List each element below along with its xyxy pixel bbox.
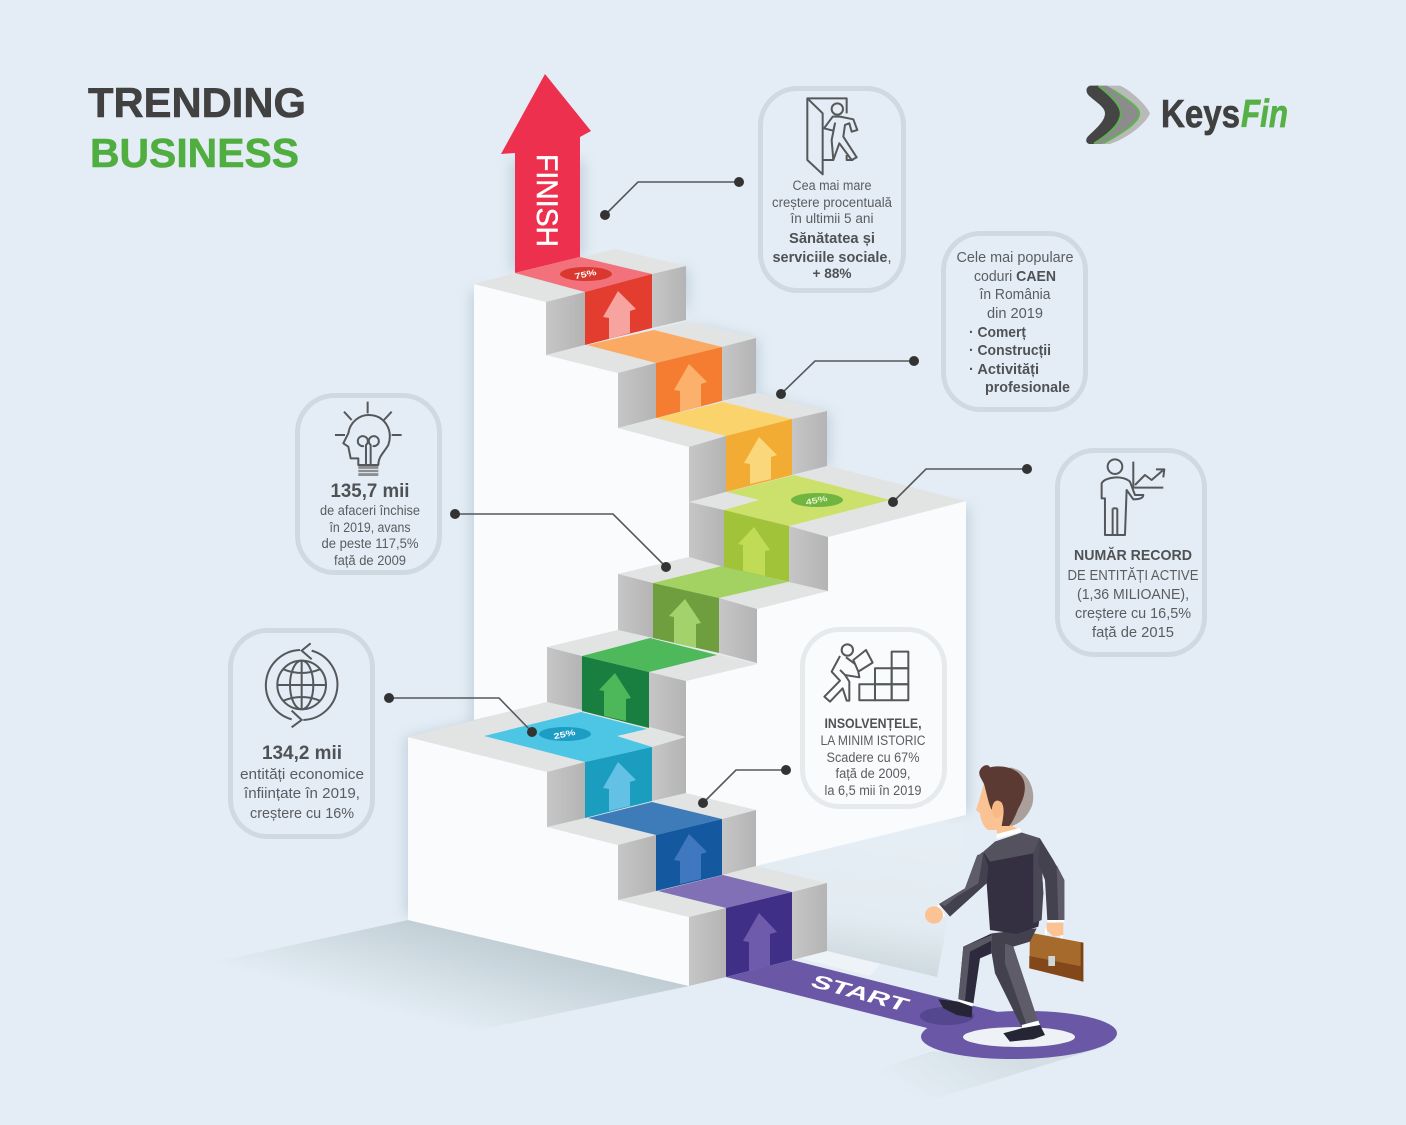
text block: · Construcții [969, 342, 1051, 359]
text block: față de 2015 [1092, 624, 1174, 641]
arm front [939, 852, 988, 917]
text block [240, 743, 364, 822]
text block: LA MINIM ISTORIC [820, 733, 926, 748]
step: start purple [618, 866, 827, 986]
logo text: Keys [1161, 93, 1240, 136]
text: start: START [806, 971, 913, 1016]
arm back [1038, 838, 1064, 920]
title: BUSINESS [90, 130, 299, 176]
panel: new entities [230, 630, 372, 836]
icon: chevron [1086, 86, 1150, 144]
text block: (1,36 MILIOANE), [1077, 586, 1189, 603]
text block: + 88% [812, 266, 852, 281]
icon: presenter with chart [1102, 459, 1164, 535]
panel: popular CAEN codes [944, 234, 1086, 410]
text: finish: FINISH [530, 154, 563, 247]
text block: 135,7 mii [330, 481, 410, 502]
text block: creștere cu 16,5% [1075, 605, 1191, 622]
step: dark green [547, 630, 757, 737]
step: red top [474, 249, 686, 355]
title [88, 79, 306, 176]
front leg [992, 928, 1038, 1027]
text block [772, 178, 892, 281]
text block: din 2019 [987, 305, 1043, 322]
text block: serviciile sociale, [772, 250, 892, 266]
step: orange [546, 321, 756, 428]
hair back [1008, 767, 1033, 827]
text block: · Activități [969, 361, 1039, 378]
text block: în România [979, 286, 1051, 303]
briefcase [1029, 928, 1083, 982]
text block: de peste 117,5% [322, 536, 418, 551]
text block: înființate în 2019, [243, 785, 360, 802]
step: yellow [618, 393, 827, 502]
text block: NUMĂR RECORD [1074, 547, 1192, 564]
step: mid green [618, 557, 828, 663]
panel: insolvencies [802, 630, 944, 806]
icon: globe with arrows [266, 643, 337, 727]
title: TRENDING [88, 79, 306, 126]
icon: worker stacking boxes [824, 644, 908, 702]
text block: Sănătatea și [789, 231, 875, 247]
badge: 45% [791, 493, 843, 508]
finish arrow [501, 74, 591, 273]
badge: 25% [539, 727, 591, 742]
text block: Cele mai populare [956, 249, 1074, 266]
floor shadows [200, 815, 1110, 1125]
panel: closed businesses [298, 396, 440, 572]
badge: 25%: 25% [553, 728, 577, 742]
text block: față de 2009 [334, 553, 406, 568]
text block: 134,2 mii [262, 743, 342, 764]
text block [956, 249, 1074, 396]
start path [726, 960, 1117, 1061]
businessman walking [925, 765, 1083, 1042]
badge: 75%: 75% [574, 268, 598, 282]
panel: exit fastest growth [760, 88, 904, 290]
back leg [958, 933, 992, 1004]
text block: la 6,5 mii în 2019 [824, 783, 922, 798]
icon: person leaving door [807, 98, 857, 174]
text block: profesionale [985, 379, 1070, 396]
text block: față de 2009, [836, 766, 910, 781]
hair [979, 765, 1025, 826]
callout lines [384, 177, 1032, 808]
text block: coduri CAEN [974, 268, 1056, 285]
text block: Scadere cu 67% [826, 750, 920, 765]
text block [820, 716, 926, 798]
text block: entități economice [240, 766, 364, 783]
step: cyan platform [408, 702, 686, 827]
step: lime platform [689, 466, 966, 591]
badge: 45%: 45% [805, 494, 829, 508]
text block: · Comerț [969, 324, 1026, 341]
text block: de afaceri închise [320, 503, 420, 518]
text block: DE ENTITĂȚI ACTIVE [1068, 567, 1198, 584]
logo text: Fin [1241, 93, 1288, 136]
badge: 75% [560, 267, 612, 282]
panel: record active entities [1058, 450, 1204, 654]
wall soft shadows [404, 160, 970, 915]
text block: INSOLVENȚELE, [824, 716, 922, 731]
text block: creștere procentuală [772, 195, 892, 210]
text block [1068, 547, 1198, 641]
icon: light bulb head [335, 402, 402, 476]
text block: creștere cu 16% [250, 805, 354, 822]
text block [320, 481, 420, 568]
logo: KeysFin [1086, 86, 1288, 144]
jacket [983, 833, 1043, 934]
white wall: upper and lower faces [408, 284, 966, 986]
text block: în 2019, avans [329, 520, 411, 535]
text block: în ultimii 5 ani [789, 211, 874, 226]
staircase [408, 74, 966, 986]
text block: Cea mai mare [792, 178, 872, 193]
face [976, 783, 1020, 836]
step: blue [547, 793, 756, 900]
